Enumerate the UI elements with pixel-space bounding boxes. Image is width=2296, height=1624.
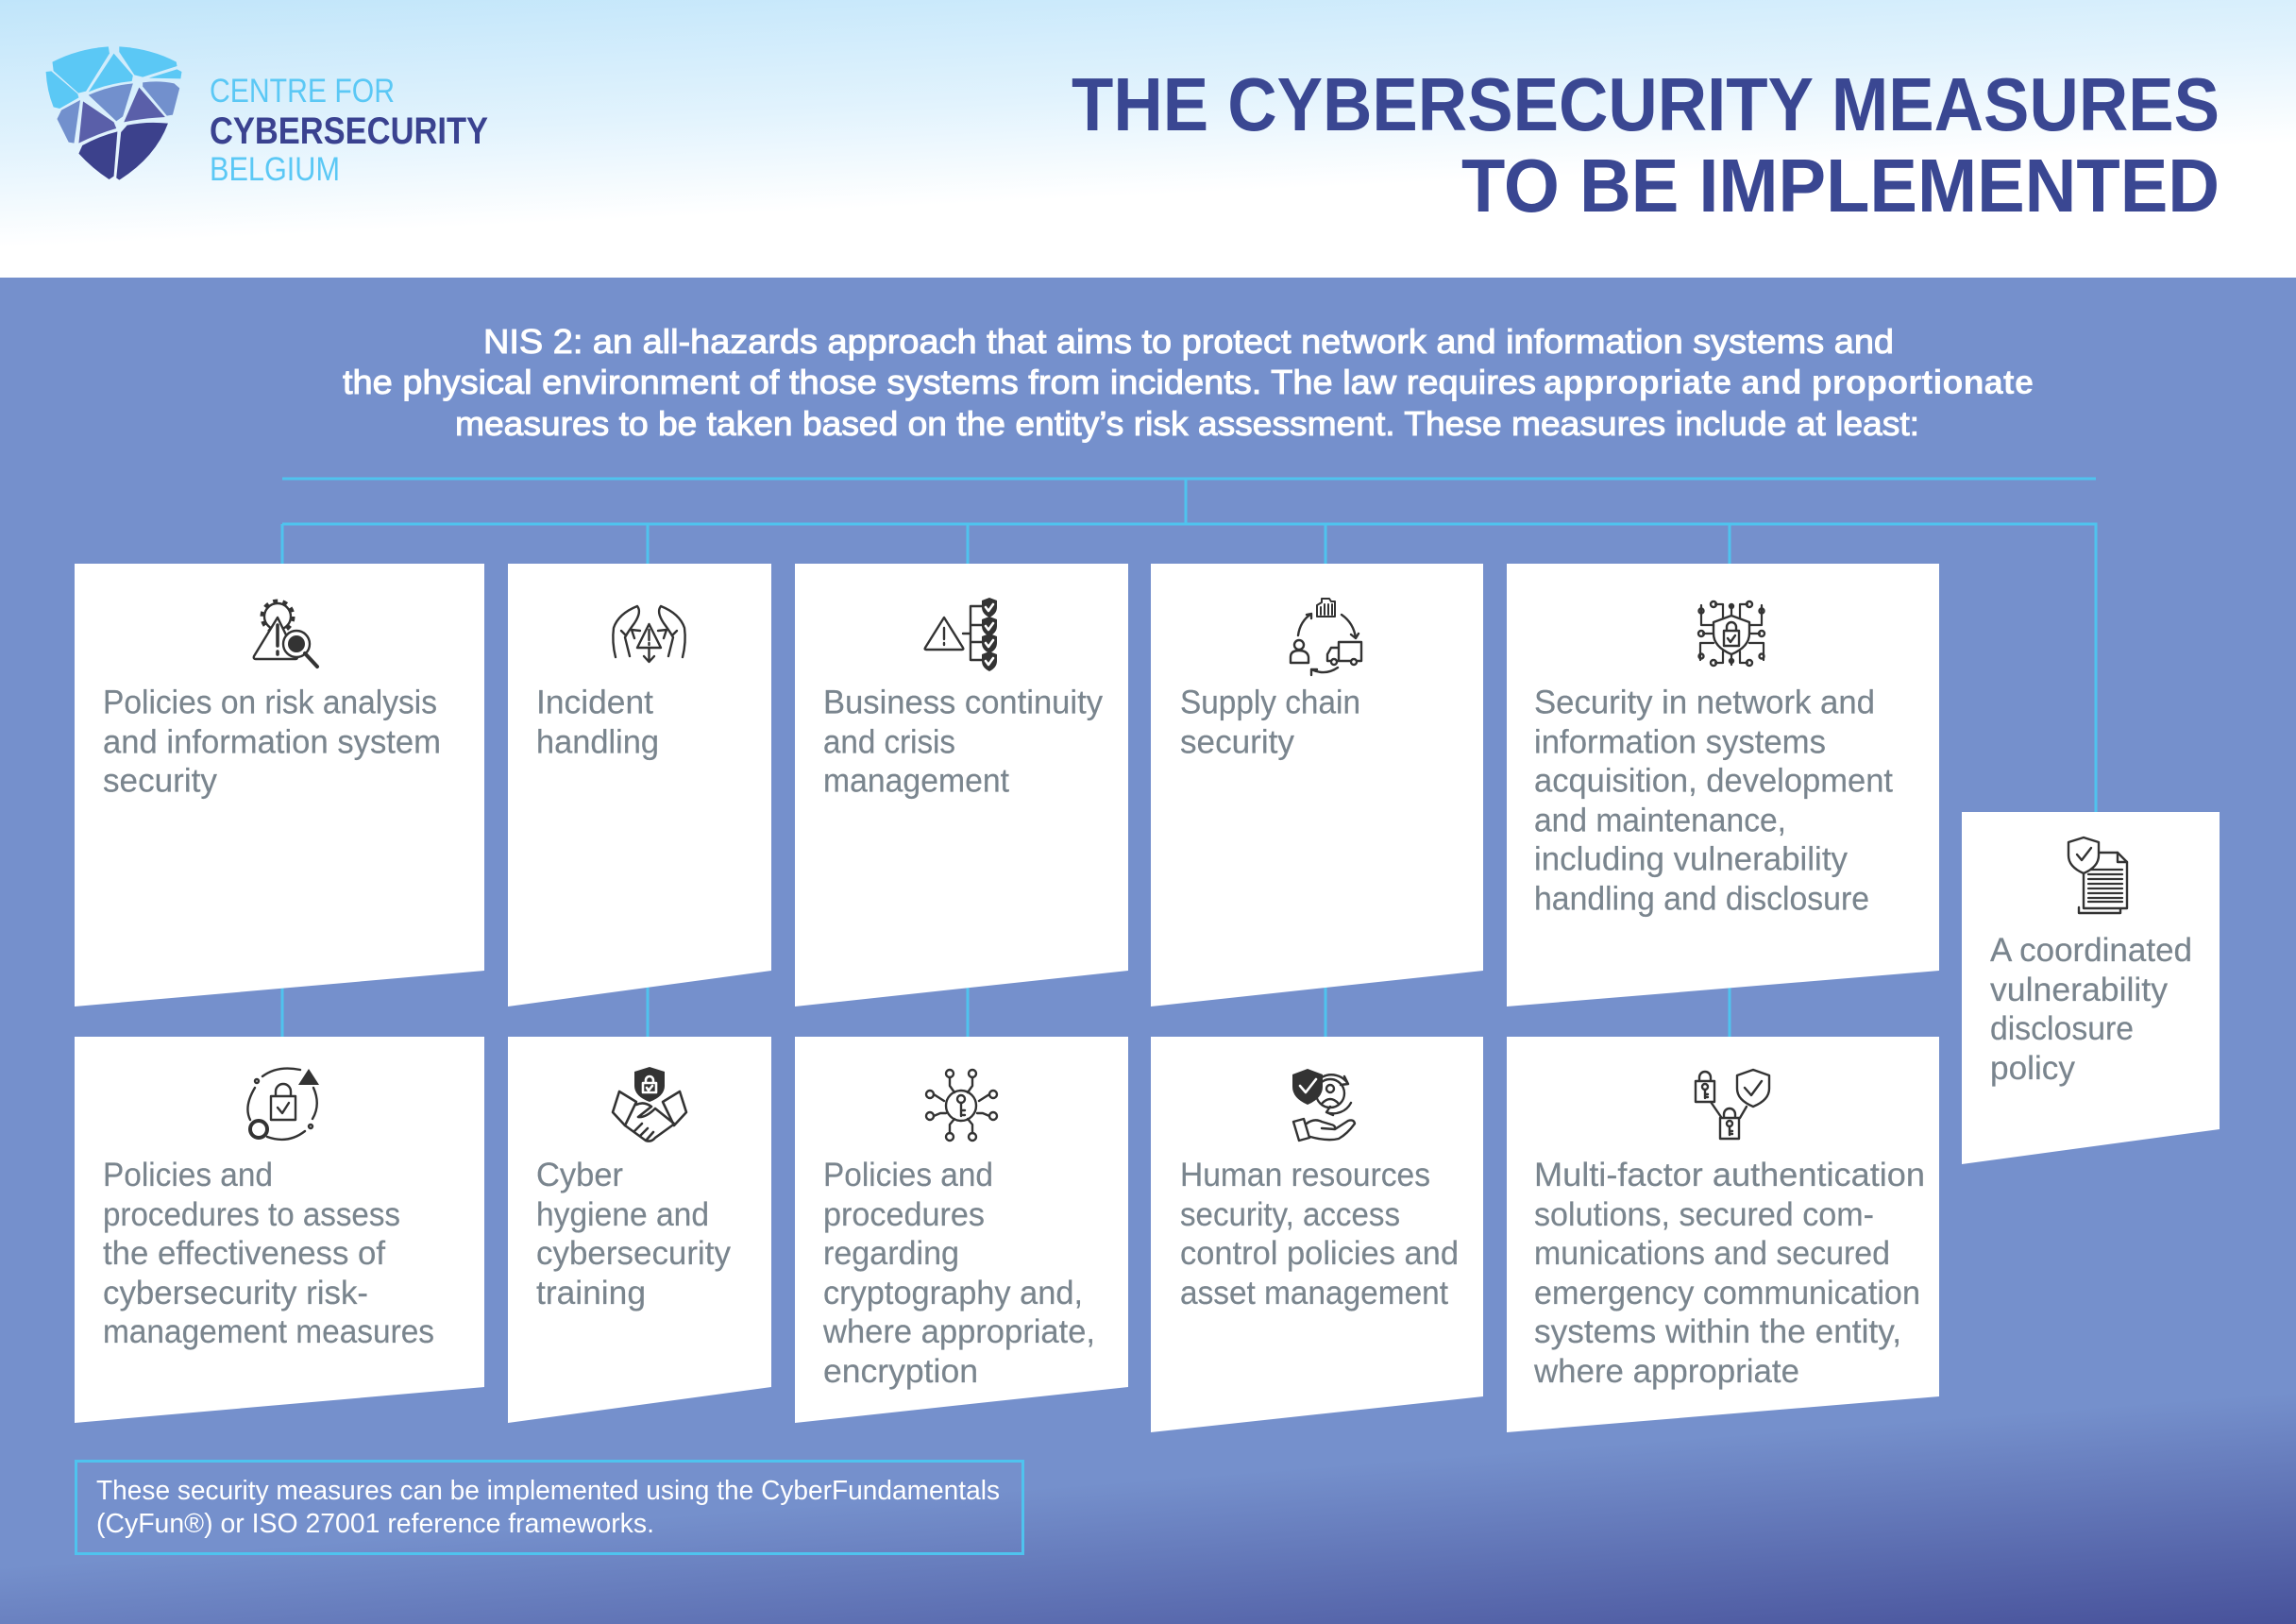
text: encryption	[823, 1352, 978, 1390]
text: acquisition, development	[1534, 761, 1893, 799]
card shape	[75, 564, 484, 1007]
text: hygiene and	[536, 1195, 709, 1233]
title: TO BE IMPLEMENTED	[1461, 144, 2220, 228]
card shape	[508, 564, 771, 1007]
text	[536, 1156, 731, 1311]
text	[103, 1156, 434, 1350]
text: management	[823, 761, 1009, 799]
logo text	[210, 73, 488, 188]
icon: locks and shield	[1696, 1070, 1769, 1139]
card shape	[75, 1037, 484, 1423]
text: disclosure	[1990, 1009, 2134, 1047]
text	[1990, 931, 2192, 1087]
text: and information system	[103, 723, 441, 761]
text: security, access	[1180, 1195, 1400, 1233]
text	[1534, 684, 1893, 918]
text: and crisis	[823, 723, 955, 761]
title	[1072, 62, 2220, 228]
icon: warning triangle and shield checklist	[925, 598, 997, 671]
icon: shield with lock and circuit	[1698, 601, 1764, 666]
card shape	[1507, 564, 1939, 1007]
text	[823, 684, 1103, 799]
icon: supply chain cycle	[1291, 599, 1361, 675]
text: Business continuity	[823, 684, 1103, 721]
text: Multi-factor authentication	[1534, 1156, 1925, 1193]
text: asset management	[1180, 1274, 1448, 1311]
text: training	[536, 1274, 646, 1311]
text: munications and secured	[1534, 1234, 1890, 1272]
icon: shield and document	[2068, 837, 2127, 913]
text: vulnerability	[1990, 971, 2168, 1008]
text	[1533, 1156, 1925, 1390]
intro text: measures to be taken based on the entity’s risk assessment. These measures include at least:	[455, 404, 1919, 443]
logo text: CYBERSECURITY	[210, 110, 488, 152]
text: information systems	[1534, 723, 1826, 761]
text: Policies and	[823, 1156, 993, 1193]
callout: reference frameworks: These security measures can be implemented using the CyberFundamentals	[96, 1476, 1000, 1506]
text: Supply chain	[1180, 684, 1360, 721]
icon: shield logo	[46, 46, 181, 180]
text: security	[1180, 723, 1294, 761]
text: Policies on risk analysis	[103, 684, 437, 721]
text: Cyber	[536, 1156, 623, 1193]
callout: reference frameworks	[76, 1462, 1023, 1554]
text: emergency communication	[1534, 1274, 1920, 1311]
card shape	[1962, 812, 2220, 1164]
header background	[0, 0, 2296, 279]
logo: Centre for Cybersecurity Belgium	[46, 46, 488, 188]
text: the effectiveness of	[103, 1234, 385, 1272]
icon: key network	[926, 1070, 997, 1141]
card: effectiveness of measures	[75, 1037, 484, 1423]
text: policy	[1990, 1049, 2075, 1087]
intro text: the physical environment of those systems from incidents. The law requires	[343, 363, 1536, 401]
text: cybersecurity	[536, 1234, 731, 1272]
card: human resources	[1151, 1037, 1483, 1432]
logo text: CENTRE FOR	[210, 73, 395, 110]
text	[536, 684, 659, 761]
intro text	[343, 322, 2034, 443]
text: handling	[536, 723, 659, 761]
card shape	[1151, 1037, 1483, 1432]
text	[103, 684, 441, 799]
card shape	[795, 564, 1128, 1007]
text: A coordinated	[1990, 931, 2192, 969]
text	[1180, 1156, 1459, 1311]
text: Policies and	[103, 1156, 273, 1193]
connector lines	[282, 479, 2096, 1039]
text: regarding	[823, 1234, 959, 1272]
text: procedures to assess	[103, 1195, 400, 1233]
text: Security in network and	[1534, 684, 1875, 721]
card: multi-factor authentication	[1507, 1037, 1939, 1432]
card: cyber hygiene	[508, 1037, 771, 1423]
card shape	[1507, 1037, 1939, 1432]
card shape	[1151, 564, 1483, 1007]
icon: hands around warning triangle	[613, 606, 685, 662]
callout: reference frameworks: (CyFun®) or ISO 27001 reference frameworks.	[96, 1509, 654, 1539]
text: where appropriate,	[822, 1312, 1095, 1350]
text: Human resources	[1180, 1156, 1430, 1193]
text: security	[103, 761, 217, 799]
text: and maintenance,	[1534, 801, 1786, 838]
text: management measures	[103, 1312, 434, 1350]
text: solutions, secured com-	[1534, 1195, 1874, 1233]
card: supply chain	[1151, 564, 1483, 1007]
logo text: BELGIUM	[210, 151, 340, 188]
text	[1180, 684, 1360, 761]
card: policies on risk analysis	[75, 564, 484, 1007]
card: business continuity	[795, 564, 1128, 1007]
text: where appropriate	[1533, 1352, 1799, 1390]
card: incident handling	[508, 564, 771, 1007]
card: cryptography	[795, 1037, 1128, 1423]
icon: shield, person and hand	[1292, 1069, 1355, 1141]
card: coordinated vulnerability disclosure	[1962, 812, 2220, 1164]
intro text: NIS 2: an all-hazards approach that aims to protect network and information systems and	[483, 322, 1894, 361]
card: security in network	[1507, 564, 1939, 1007]
intro text: appropriate and proportionate	[1544, 363, 2034, 401]
icon: warning triangle, gear and magnifier	[254, 601, 317, 667]
icon: shield and handshake	[613, 1067, 686, 1142]
icon: lock in cycle	[247, 1069, 319, 1140]
text: handling and disclosure	[1534, 880, 1869, 918]
card shape	[508, 1037, 771, 1423]
text: cryptography and,	[823, 1274, 1083, 1311]
text: including vulnerability	[1534, 840, 1848, 878]
text: procedures	[823, 1195, 985, 1233]
text: Incident	[536, 684, 653, 721]
text: control policies and	[1180, 1234, 1459, 1272]
text	[822, 1156, 1095, 1390]
text: cybersecurity risk-	[103, 1274, 368, 1311]
text: systems within the entity,	[1534, 1312, 1901, 1350]
card shape	[795, 1037, 1128, 1423]
